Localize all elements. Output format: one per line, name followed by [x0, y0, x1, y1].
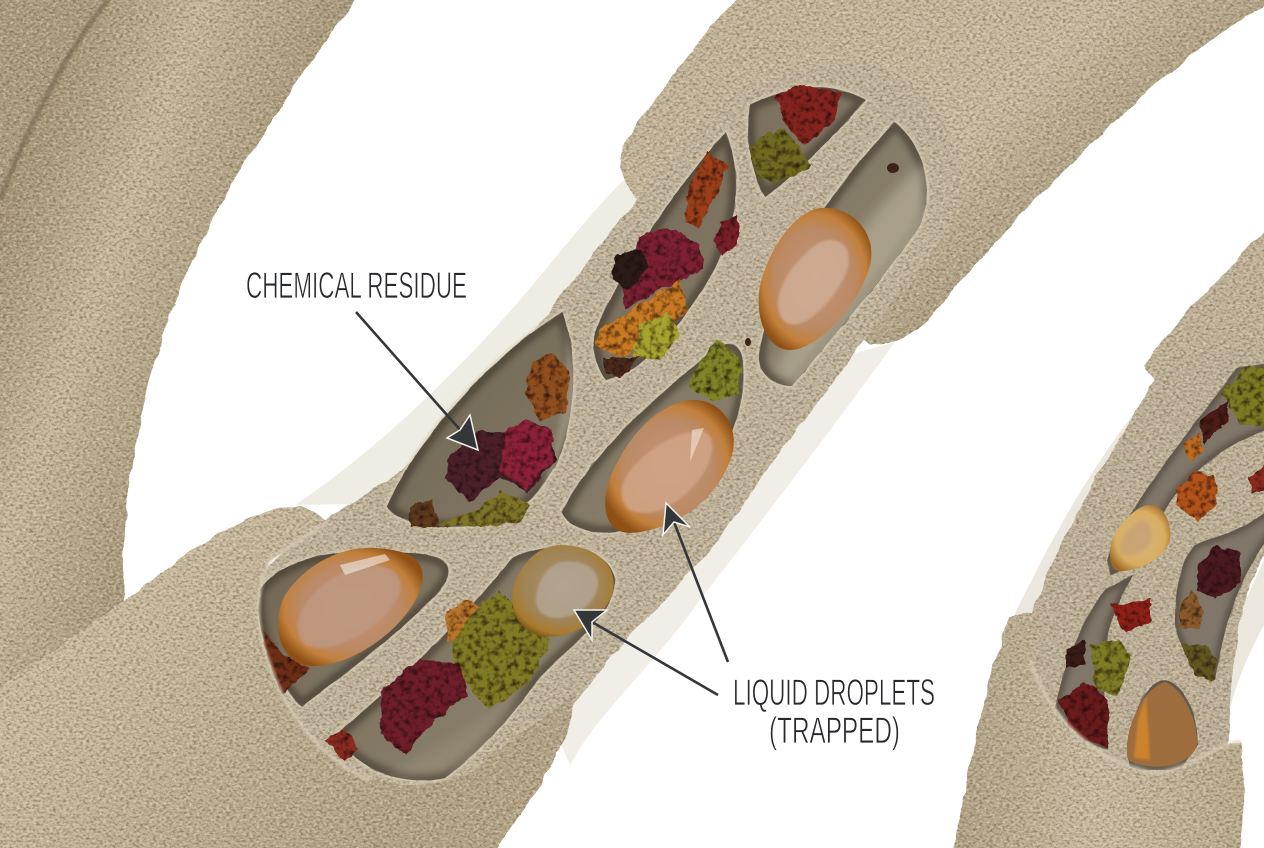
droplet: middle chamber: [605, 400, 734, 533]
crease between back and left fibres: [0, 0, 108, 200]
right fibre: sleeve rim highlight: [1030, 660, 1241, 772]
right fibre: chambers: [1055, 362, 1264, 770]
chamber inner shadows: [258, 87, 930, 780]
droplet: top right chamber: [759, 208, 871, 350]
right fibre: [953, 222, 1264, 848]
porous lattice with chambers: [249, 62, 960, 795]
arrow: to chemical residue: [356, 312, 478, 450]
right fibre: residue particles: [1058, 365, 1264, 748]
label: liquid droplets: LIQUID DROPLETS: [733, 672, 935, 713]
pores: [745, 163, 899, 346]
chamber rims: [258, 87, 927, 780]
right fibre: bottom sleeve: [953, 613, 1243, 848]
residue particles: main fibre: [262, 85, 840, 760]
droplets: main fibre: [278, 208, 871, 666]
back fibre, top left: [0, 0, 125, 225]
droplet: lower-left chamber: [278, 548, 423, 666]
right fibre: upper sleeve: [1144, 222, 1264, 388]
chamber backs: [258, 87, 927, 780]
lattice body: [249, 62, 960, 795]
right fibre: droplet upper: [1110, 505, 1170, 571]
upper tube sleeve: [621, 0, 1264, 345]
label: chemical residue: CHEMICAL RESIDUE: [246, 265, 467, 306]
arrow: to centre droplet: [574, 610, 718, 695]
translucent sheath: right fibre: [1012, 392, 1264, 745]
cut sleeve, bottom left: [0, 505, 573, 848]
right fibre: lattice: [1020, 342, 1264, 790]
arrow: to middle droplet: [663, 503, 728, 662]
droplet: centre chamber: [512, 545, 613, 637]
translucent sheath: main fibre: [295, 165, 895, 765]
large fibre, left: [0, 0, 362, 695]
label: trapped: (TRAPPED): [769, 710, 900, 751]
right fibre: chamber shadows: [1055, 362, 1264, 770]
right fibre: droplet lower: [1127, 682, 1197, 767]
